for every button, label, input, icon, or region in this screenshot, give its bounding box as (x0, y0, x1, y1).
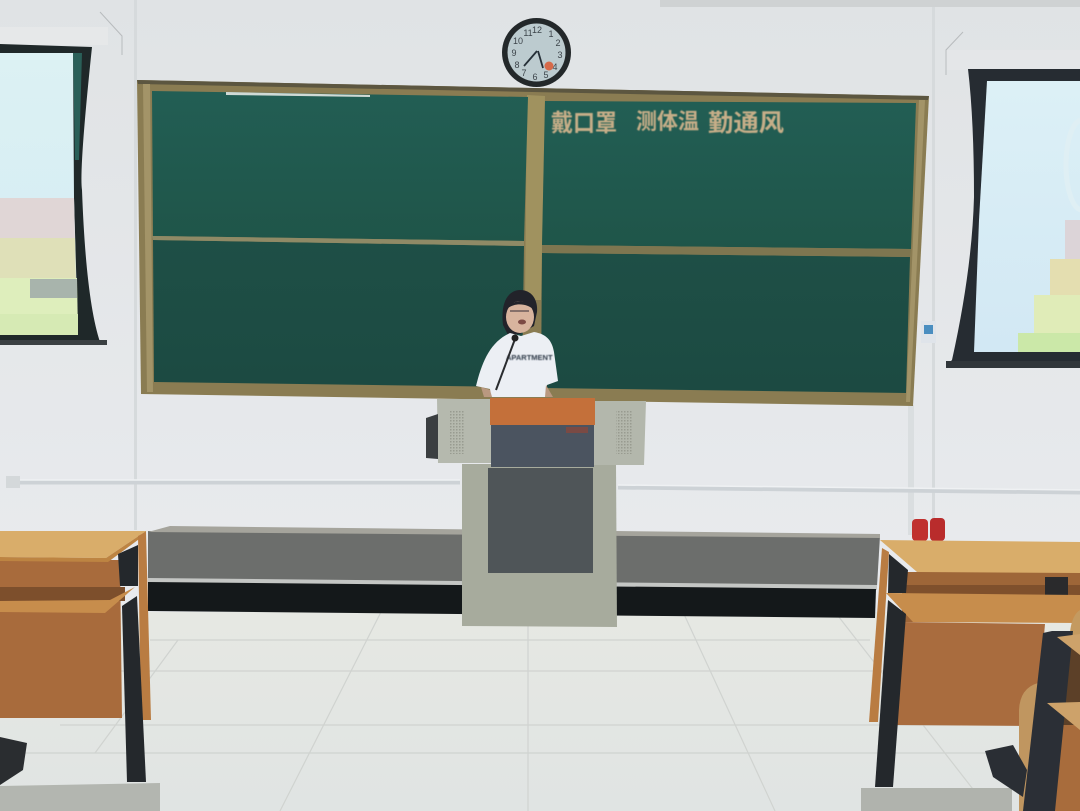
orange top panel (490, 398, 595, 425)
left projector screen (0, 12, 122, 345)
wall clock: 3 (557, 50, 563, 60)
lectern wings (426, 399, 646, 465)
right projector screen (945, 32, 1080, 368)
wall clock (502, 18, 571, 87)
wall clock: 1 (548, 29, 554, 39)
wall pipe (6, 476, 1080, 492)
left desk (0, 531, 160, 811)
right desk (861, 540, 1080, 811)
wall clock: 2 (555, 38, 561, 48)
dark panel (491, 425, 594, 467)
board panel: bottom right (541, 253, 910, 393)
lectern (426, 398, 646, 627)
fire extinguishers (912, 518, 945, 541)
wall clock: 7 (521, 68, 527, 78)
back wall bench (148, 526, 880, 618)
speaker (476, 290, 558, 397)
white t-shirt (476, 332, 558, 397)
wall clock: 5 (543, 70, 549, 80)
lectern base (462, 464, 617, 627)
wall clock: 6 (532, 72, 538, 82)
chalk writing: 勤通风 (708, 110, 784, 137)
wall clock: 4 (552, 62, 558, 72)
chalk writing: 测体温 (636, 109, 699, 134)
floor (0, 612, 1080, 811)
hair and head (502, 290, 537, 335)
microphone (496, 339, 515, 390)
chalkboard (137, 80, 929, 406)
foreground chair (985, 610, 1080, 811)
speaker: APARTMENT (506, 353, 553, 362)
board panel: top right (542, 101, 916, 249)
board panel: bottom left (153, 240, 524, 387)
board panel: top left (152, 91, 528, 241)
wall clock: 10 (513, 36, 523, 46)
chalk writing (551, 109, 784, 137)
wall clock: 12 (532, 25, 542, 35)
wall switch (921, 321, 936, 343)
wall clock: 8 (514, 60, 520, 70)
wall clock: 11 (523, 28, 533, 38)
wall clock: 9 (511, 48, 517, 58)
chalk writing: 戴口罩 (551, 110, 617, 137)
wall background (0, 0, 1080, 620)
